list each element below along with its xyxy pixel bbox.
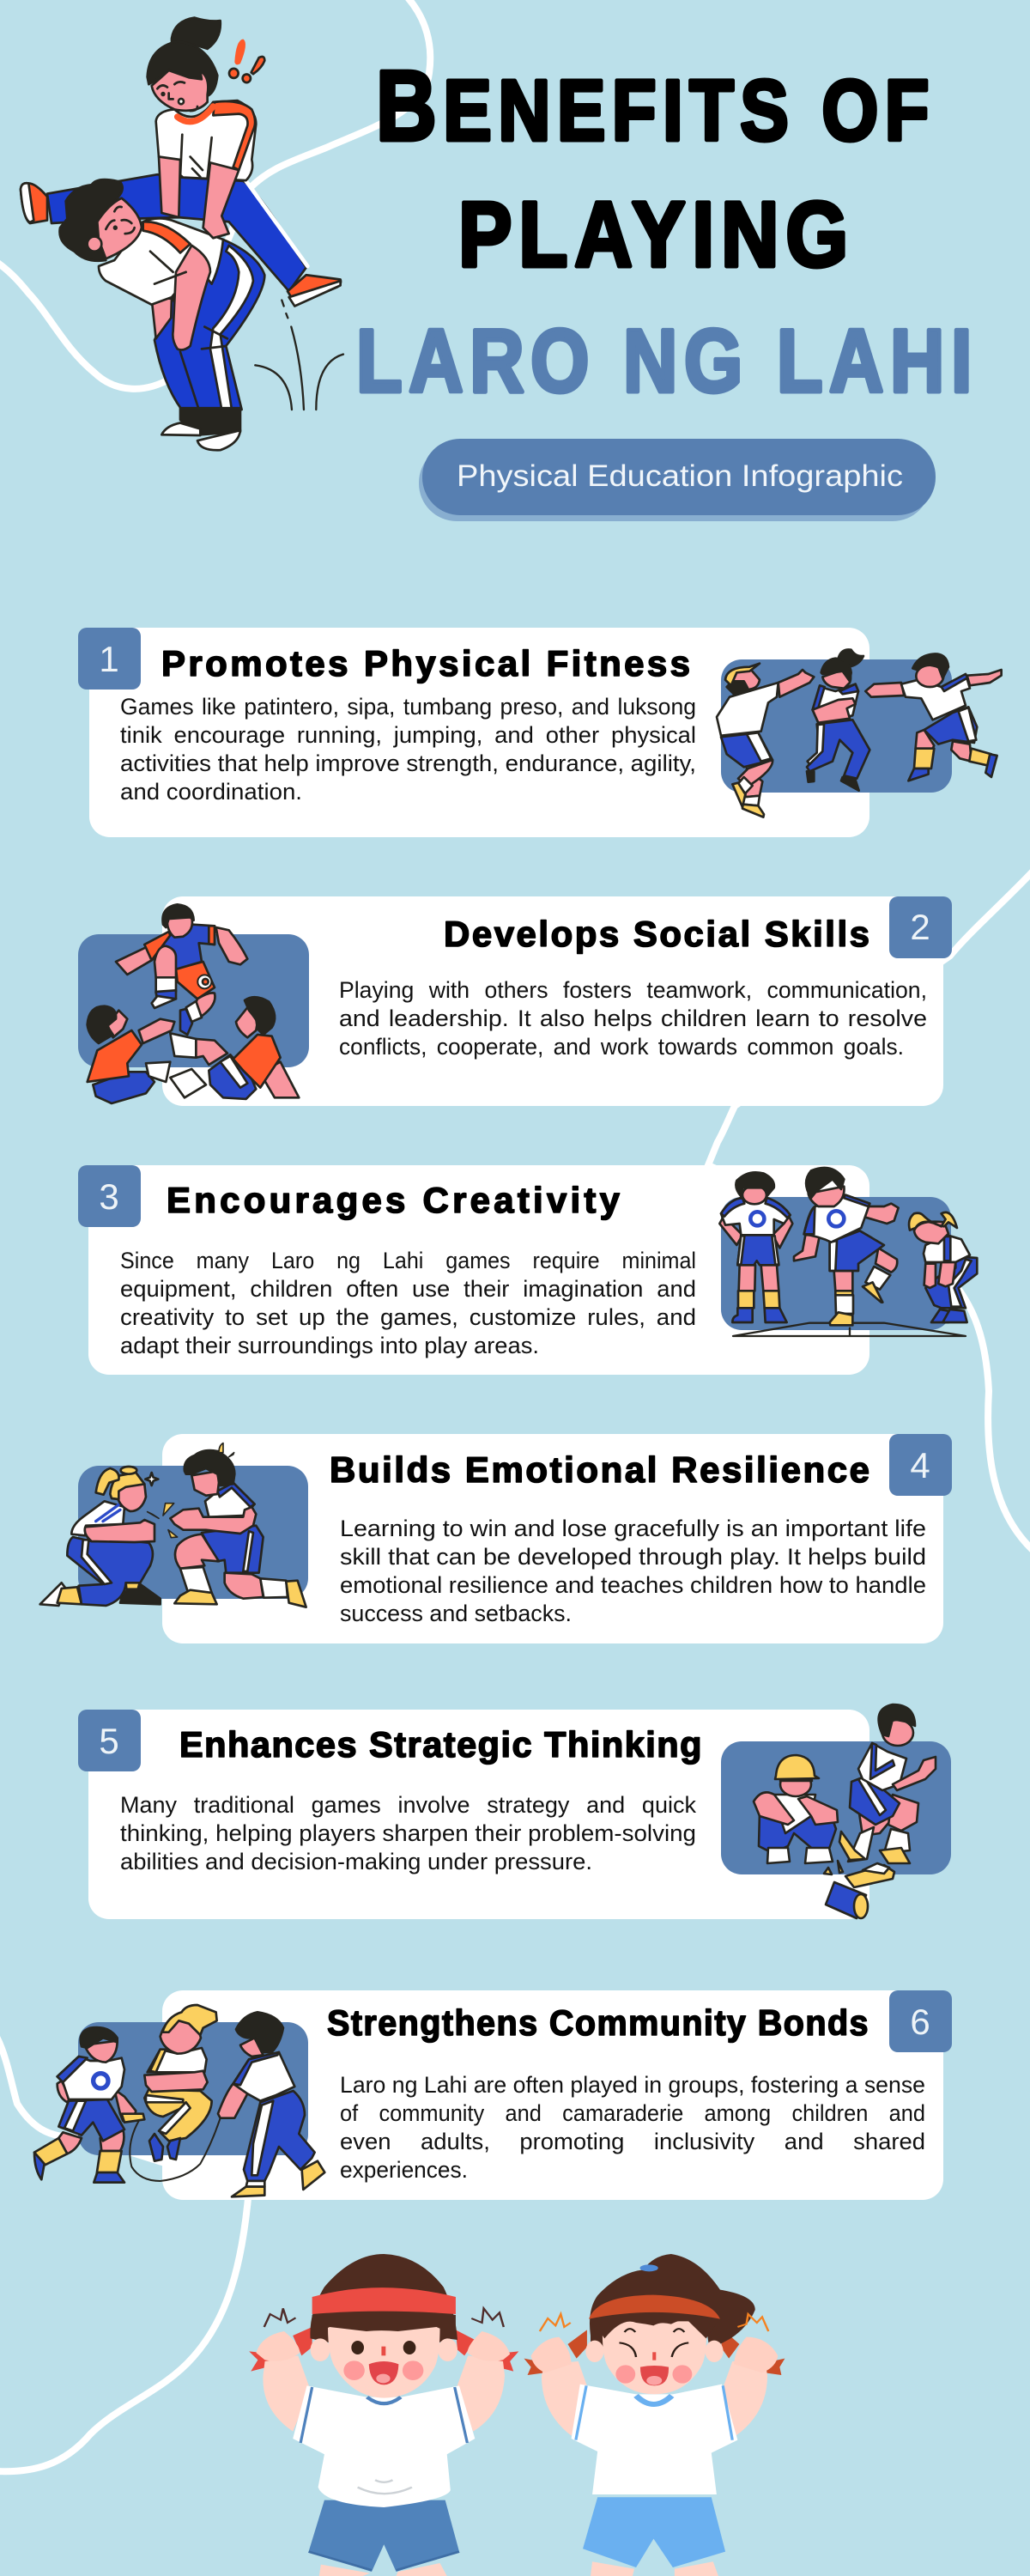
number badge 3 <box>78 1165 141 1227</box>
body text 1: activities that help improve strength, endurance, agility, <box>120 750 696 776</box>
title line: Playing: PLAYING <box>458 182 855 286</box>
body text 5: thinking, helping players sharpen their problem-solving <box>120 1820 696 1846</box>
heading 1: Promotes Physical Fitness <box>161 643 690 683</box>
illustration: two children kneeling <box>40 1443 306 1607</box>
heading 2: Develops Social Skills <box>444 914 869 954</box>
panel: card 6 <box>34 1990 952 2200</box>
body text 4: emotional resilience and teaches children how to handle <box>340 1572 926 1598</box>
illustration backdrop 5 <box>721 1741 951 1874</box>
number badge 6: 6 <box>910 2002 930 2042</box>
number badge 6 <box>889 1990 952 2052</box>
illustration: three children running <box>717 649 1002 817</box>
number badge 1 <box>78 628 141 690</box>
body text 5 <box>120 1792 697 1874</box>
body text 3: adapt their surroundings into play areas. <box>120 1333 539 1358</box>
number badge 2: 2 <box>910 907 930 947</box>
body text 4 <box>340 1516 926 1626</box>
panel: card 2 <box>78 896 952 1106</box>
heading 6: Strengthens Community Bonds <box>327 2002 869 2043</box>
heading 3: Encourages Creativity <box>167 1180 621 1220</box>
illustration: three children hopping on a court <box>719 1168 977 1336</box>
body text 6: experiences. <box>340 2157 468 2183</box>
body text 3: Since many Laro ng Lahi games require minimal <box>120 1248 696 1273</box>
body text 3: equipment, children often use their imagination and <box>120 1276 696 1302</box>
illustration: three children playing together <box>88 904 299 1103</box>
title line: Benefits of: BENEFITS OF <box>376 50 936 161</box>
subtitle pill: Physical Education Infographic <box>457 459 903 493</box>
illustration: girl with ponytail <box>524 2254 785 2576</box>
body text 5: Many traditional games involve strategy and quick <box>120 1792 697 1818</box>
title: Benefits of Playing Laro ng Lahi <box>356 50 978 411</box>
body text 4: Learning to win and lose gracefully is an important life <box>340 1516 926 1541</box>
illustration: boy with red headband <box>249 2254 518 2576</box>
illustration backdrop 6 <box>78 2022 308 2155</box>
illustration backdrop 4 <box>78 1466 308 1599</box>
body text 2: Playing with others fosters teamwork, communication, <box>339 977 927 1003</box>
body text 3 <box>120 1248 696 1358</box>
panel: card 1 <box>78 628 1002 837</box>
illustration: children with jump rope <box>34 2005 324 2196</box>
illustration backdrop 1 <box>721 659 952 793</box>
body text 2 <box>339 977 927 1060</box>
body text 4: success and setbacks. <box>340 1601 572 1626</box>
body text 1: Games like patintero, sipa, tumbang preso, and luksong <box>120 694 696 720</box>
number badge 4: 4 <box>910 1445 930 1485</box>
body text 1: and coordination. <box>120 779 302 805</box>
number badge 2 <box>889 896 952 958</box>
body text 3: creativity to set up the games, customize rules, and <box>120 1304 696 1330</box>
body text 1: tinik encourage running, jumping, and other physical <box>120 722 696 748</box>
number badge 3: 3 <box>99 1176 119 1217</box>
number badge 5: 5 <box>99 1721 119 1761</box>
heading 5: Enhances Strategic Thinking <box>179 1724 703 1765</box>
number badge 5 <box>78 1710 141 1771</box>
illustration backdrop 2 <box>78 934 309 1067</box>
illustration: children playing tumbang preso <box>754 1704 936 1918</box>
number badge 4 <box>889 1434 952 1496</box>
illustration: leapfrog children <box>21 18 343 450</box>
subtitle pill <box>419 439 936 521</box>
body text 6: Laro ng Lahi are often played in groups, fostering a sense <box>340 2072 925 2098</box>
body text 1 <box>120 694 696 805</box>
panel: card 5 <box>78 1704 951 1919</box>
body text 2: conflicts, cooperate, and work towards common goals. <box>339 1034 904 1060</box>
illustration backdrop 3 <box>721 1197 951 1330</box>
body text 4: skill that can be developed through play. It helps build <box>340 1544 926 1570</box>
body text 6 <box>340 2072 925 2183</box>
body text 2: and leadership. It also helps children learn to resolve <box>339 1005 927 1031</box>
heading 4: Builds Emotional Resilience <box>330 1449 869 1490</box>
body text 6: of community and camaraderie among children and <box>340 2100 925 2126</box>
body text 6: even adults, promoting inclusivity and shared <box>340 2129 925 2154</box>
panel: card 3 <box>78 1165 977 1375</box>
panel: card 4 <box>40 1434 952 1643</box>
body text 5: abilities and decision-making under pressure. <box>120 1849 592 1874</box>
number badge 1: 1 <box>99 639 119 679</box>
